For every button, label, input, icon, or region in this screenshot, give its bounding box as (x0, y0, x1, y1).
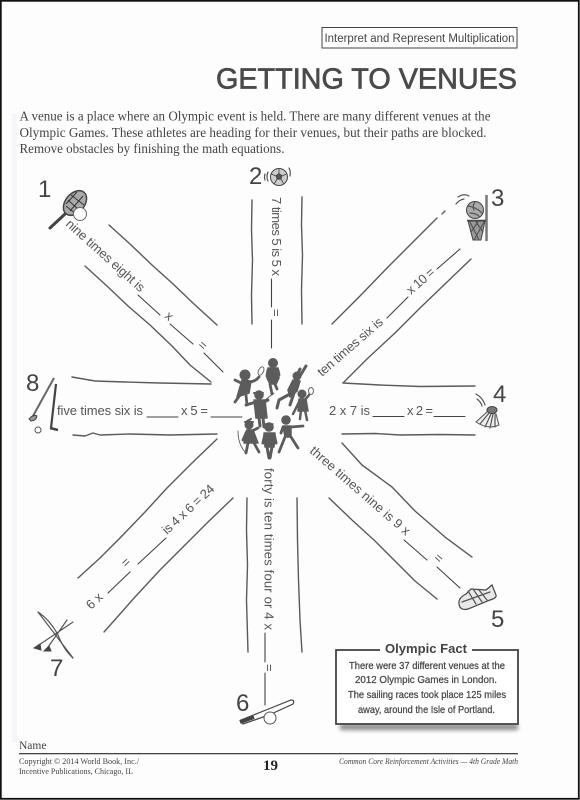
path 6: baseball (246, 468, 302, 705)
icon: bow and arrows (34, 612, 73, 658)
path 5: running shoe: three times nine is 9 x (307, 443, 414, 539)
athlete: capped player (246, 391, 274, 427)
path 3: basketball: ten times six is (314, 314, 386, 379)
path 3: basketball: x 10 = (403, 264, 438, 297)
numbers: 2 (249, 163, 262, 190)
path 2: soccer: = (269, 309, 284, 317)
path 8: golf: five times six is (57, 403, 144, 418)
path 4: shuttlecock: 2 x 7 is (329, 403, 370, 418)
athlete: archer (238, 419, 259, 453)
path 4: shuttlecock (329, 383, 475, 435)
path 5: running shoe: = (431, 550, 447, 566)
path 6: baseball: forty is ten times four or 4 x (262, 468, 276, 630)
athlete: striding man (279, 416, 303, 452)
numbers: 1 (38, 176, 51, 203)
path 8: golf: x 5 = (181, 403, 208, 418)
numbers: 6 (236, 690, 249, 717)
path 7: archery: is 4 x 6 = 24 (159, 481, 217, 537)
path 1: tennis: x (162, 308, 177, 324)
athletes group (235, 358, 314, 458)
Olympic Fact callout: Olympic Fact (385, 641, 468, 656)
footer name line: Name (19, 740, 46, 752)
athlete: standing girl (267, 358, 279, 394)
icon: tennis racket and ball (50, 186, 91, 228)
Olympic Fact callout: away, around the Isle of Portland. (358, 704, 495, 716)
Olympic Fact callout: 2012 Olympic Games in London. (355, 674, 497, 686)
intro text: Remove obstacles by finishing the math equations. (20, 142, 284, 157)
path 3: basketball (314, 211, 471, 383)
icon: bat and ball (240, 700, 294, 724)
Olympic Fact callout: The sailing races took place 125 miles (348, 689, 506, 701)
numbers: 3 (491, 185, 504, 212)
intro text: A venue is a place where an Olympic event is held. There are many different venues at the (20, 110, 490, 124)
page number: 19 (263, 758, 278, 774)
copyright (19, 756, 140, 776)
intro text (20, 110, 490, 157)
path 7: archery: = (118, 554, 134, 570)
title: GETTING TO VENUES (216, 64, 517, 96)
numbers: 5 (491, 606, 504, 633)
numbers: 7 (50, 655, 63, 682)
path 5: running shoe (307, 443, 472, 599)
path 7: archery: 6 x (83, 589, 106, 612)
path 1: tennis: = (195, 337, 211, 353)
Olympic Fact callout: There were 37 different venues at the (349, 660, 505, 672)
copyright: Copyright © 2014 World Book, Inc./ (19, 756, 140, 766)
numbers (26, 163, 506, 717)
path 1: tennis: nine times eight is (63, 216, 148, 295)
numbers: 4 (493, 381, 506, 408)
icon: golf clubs and ball (29, 378, 58, 433)
athlete: girl with racket (293, 388, 314, 420)
Olympic Fact callout (336, 641, 518, 730)
path 1: tennis (63, 216, 223, 382)
icon: soccer ball (264, 168, 290, 186)
athlete: jumping runner (277, 366, 306, 408)
intro text: Olympic Games. These athletes are heading for their venues, but their paths are blocked. (20, 126, 486, 141)
path 7: archery (78, 439, 233, 632)
athlete: standing boy (263, 423, 276, 458)
icon: running shoe (459, 585, 496, 609)
path 8: golf (57, 377, 242, 436)
topic label box: Interpret and Represent Multiplication (324, 33, 514, 45)
path 2: soccer (252, 197, 302, 348)
icon: basketball and hoop (456, 195, 486, 241)
topic label box (322, 28, 517, 48)
copyright: Incentive Publications, Chicago, IL (19, 766, 133, 776)
icon: shuttlecock (476, 394, 499, 428)
path 2: soccer: 7 times 5 is 5 x (269, 197, 284, 276)
book title: Common Core Reinforcement Activities — 4th Grade Math (339, 756, 518, 766)
path 6: baseball: = (262, 664, 277, 672)
path 4: shuttlecock: x 2 = (407, 403, 433, 418)
numbers: 8 (26, 370, 39, 397)
athlete: tennis player (235, 366, 265, 405)
